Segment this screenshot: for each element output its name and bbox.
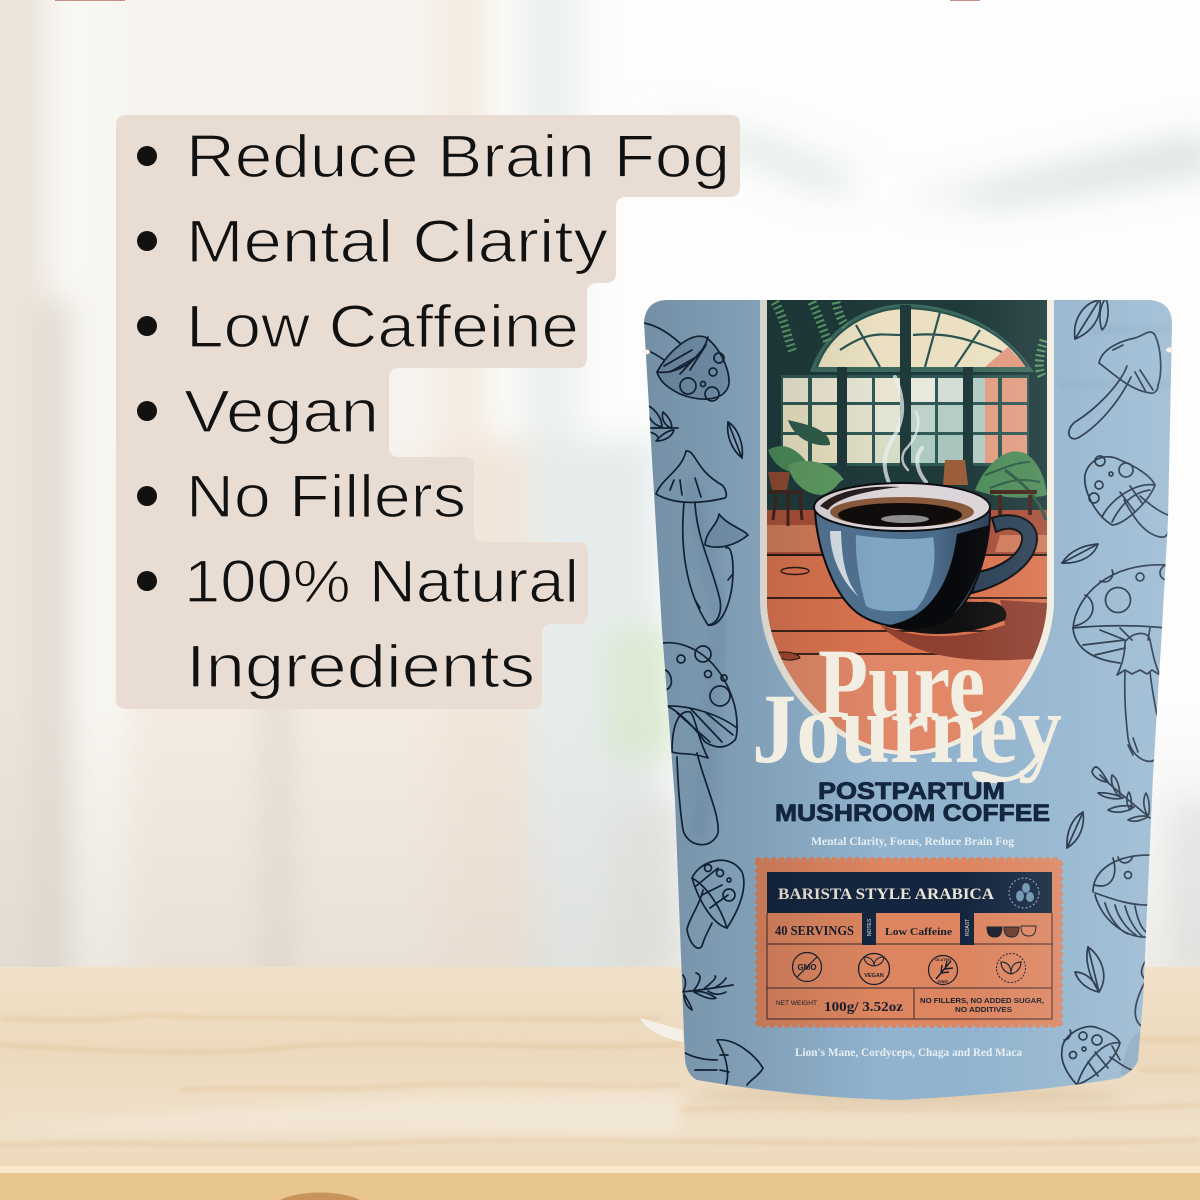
product name: [775, 778, 1050, 827]
mushroom: right lower: [1093, 855, 1150, 937]
no fillers note: NO FILLERS, NO ADDED SUGAR,: [920, 996, 1044, 1005]
barista header: BARISTA STYLE ARABICA: [778, 886, 994, 903]
bullet: vegan: Vegan: [184, 378, 379, 445]
bullet: reduce brain fog: Reduce Brain Fog: [186, 123, 730, 190]
cup shadow: [880, 600, 1047, 660]
table rules: [767, 913, 1052, 1019]
icon: gluten free: GLUTEN: [935, 958, 951, 962]
product name: POSTPARTUM: [818, 778, 1005, 805]
leaves lower right: [1075, 947, 1104, 992]
wooden tabletop: [767, 555, 1047, 755]
lighting overlay: [640, 296, 1180, 1106]
text highlight background: [116, 115, 740, 709]
mushroom: lower left tilted: [687, 860, 744, 948]
net weight: [776, 1000, 903, 1015]
mushroom: top right: [1069, 332, 1161, 439]
pouch body and printed art: [640, 296, 1180, 1106]
leaves top right: [1075, 298, 1108, 339]
fern lower left: [682, 973, 733, 1010]
mushroom: right middle: [1085, 456, 1168, 537]
fern right: [1092, 767, 1150, 821]
bullet: low caffeine: Low Caffeine: [186, 293, 579, 360]
icon: vegan: VEGAN: [864, 973, 884, 979]
bullet: 100% natural ingredients: Ingredients: [186, 633, 535, 700]
window panes: [781, 367, 1029, 466]
no fillers note: [920, 996, 1044, 1014]
arched label border: [760, 300, 1054, 755]
product name: MUSHROOM COFFEE: [775, 800, 1050, 827]
seal tear notches: [642, 348, 1174, 354]
icon: gluten free: [928, 956, 958, 984]
mushroom: big right: [1073, 565, 1166, 761]
back wall: [767, 300, 1047, 780]
ingredients line: Lion's Mane, Cordyceps, Chaga and Red Maca: [795, 1047, 1022, 1059]
plant right: [975, 451, 1047, 520]
leaf sprig left: [646, 405, 678, 441]
floor: [767, 510, 1047, 554]
icon: no GMO: GMO: [797, 963, 817, 972]
servings row: ROAST: [965, 919, 971, 936]
steam: [885, 377, 926, 490]
mushroom: bottom left: [685, 1040, 763, 1085]
cup handle: [972, 515, 1037, 593]
arched window fan: [810, 304, 1034, 375]
hanging fern: [775, 302, 1044, 378]
cup dark side: [885, 525, 990, 629]
servings row: Low Caffeine: [885, 926, 952, 938]
pouch shadow: [695, 1088, 1125, 1104]
brand logo: Journey: [752, 673, 1062, 784]
bullet: 100% natural ingredients: [137, 548, 579, 700]
stamp background: [758, 860, 1060, 1024]
info label: [758, 860, 1060, 1024]
cup highlight: [856, 535, 934, 611]
mushroom: tall pair: [656, 451, 748, 625]
leaf small right: [1067, 812, 1083, 848]
mushroom: big left: [663, 643, 737, 845]
leaf right: [1062, 544, 1098, 563]
icon: no GMO: [792, 952, 822, 982]
wooden table: [0, 967, 1200, 1200]
bullet: mental clarity: Mental Clarity: [186, 208, 608, 275]
benefits bullet list: [137, 123, 730, 700]
bullet: no fillers: No Fillers: [186, 463, 466, 530]
icon: natural ingredients: [996, 954, 1026, 982]
cup rim: [814, 483, 990, 531]
net weight: NET WEIGHT: [776, 1000, 817, 1007]
product pouch: [640, 296, 1180, 1106]
no fillers note: NO ADDITIVES: [955, 1005, 1012, 1014]
barista header: [767, 872, 1052, 913]
brand logo: Pure: [818, 628, 985, 739]
plant left: [768, 420, 844, 526]
icon: vegan: [858, 954, 890, 984]
cup bowl: [815, 510, 990, 628]
servings row: NOTES: [867, 918, 873, 936]
partial stem right: [1135, 960, 1146, 1027]
mushroom: top left: [644, 323, 729, 401]
leaf: [728, 422, 742, 458]
icon: gluten free: FREE: [938, 980, 949, 984]
cafe illustration: [767, 300, 1047, 780]
servings row: 40 SERVINGS: [775, 924, 854, 939]
brand logo: [752, 628, 1062, 784]
planter mid: [943, 460, 968, 485]
bullet: 100% natural ingredients: 100% Natural: [184, 548, 579, 615]
net weight: 100g/ 3.52oz: [824, 1000, 903, 1015]
tagline: Mental Clarity, Focus, Reduce Brain Fog: [811, 836, 1014, 848]
roast cups icon: [987, 926, 1036, 937]
coffee surface: [830, 497, 974, 527]
servings row: [775, 913, 974, 945]
coffee cup: [814, 483, 1037, 629]
mushroom: bottom right: [1062, 1027, 1132, 1085]
